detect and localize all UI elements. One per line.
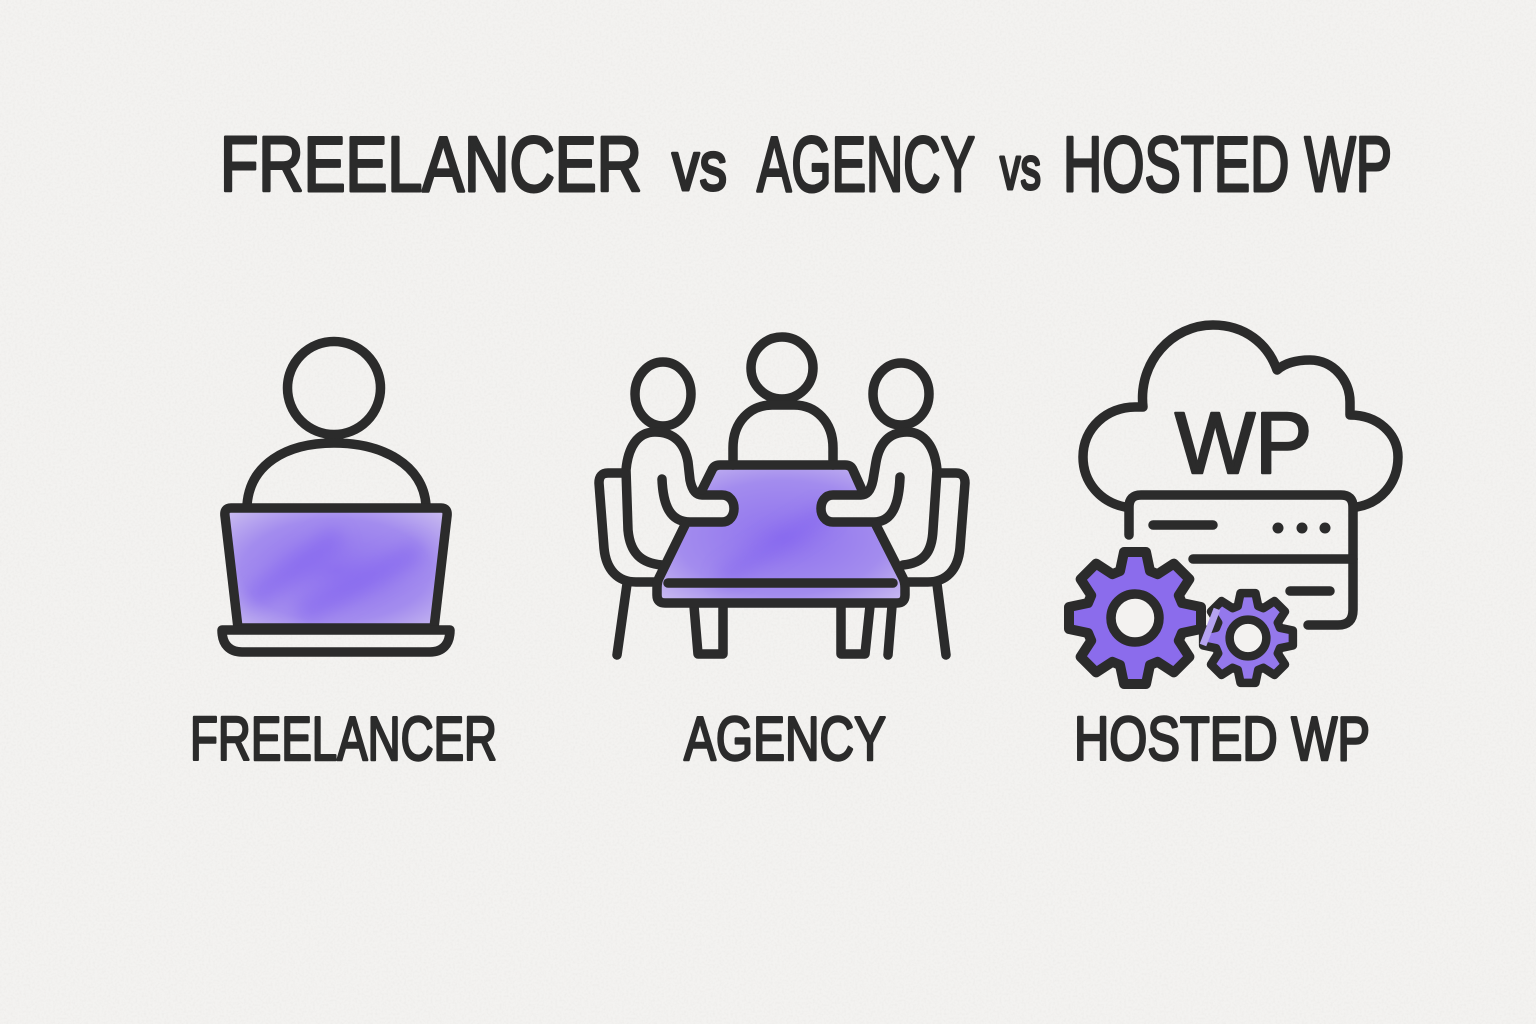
laptop base [222,630,450,652]
icon: freelancer at laptop [220,342,452,652]
label: hosted wp: HOSTED WP [1074,705,1370,774]
table legs [694,606,870,654]
server outline [1129,495,1353,625]
label: agency: AGENCY [684,705,886,774]
title [220,120,1392,208]
cloud [1083,325,1398,507]
laptop screen outline [225,508,447,628]
label: freelancer: FREELANCER [190,705,497,774]
shoulders [247,443,426,505]
large gear [1069,552,1201,684]
server details [1153,522,1353,591]
laptop screen watercolor fill [230,512,442,624]
table outline [657,465,905,603]
table edge line [668,578,893,588]
title: AGENCY [757,120,975,208]
head [288,342,380,434]
left chair [599,473,655,655]
WP lettering: WP [1175,395,1312,492]
title: vs [672,127,727,205]
title: FREELANCER [220,120,642,208]
title: vs [1000,135,1041,202]
icon: agency team at table [599,337,965,655]
right person [821,363,937,565]
right chair [888,473,965,655]
left person [626,362,734,565]
small gear [1203,593,1293,683]
title: HOSTED WP [1063,120,1392,208]
table watercolor fill [662,470,900,598]
center person [733,337,833,465]
icon: hosted WordPress cloud server gears [1069,325,1398,684]
small gear broken edge patch [1203,609,1217,645]
